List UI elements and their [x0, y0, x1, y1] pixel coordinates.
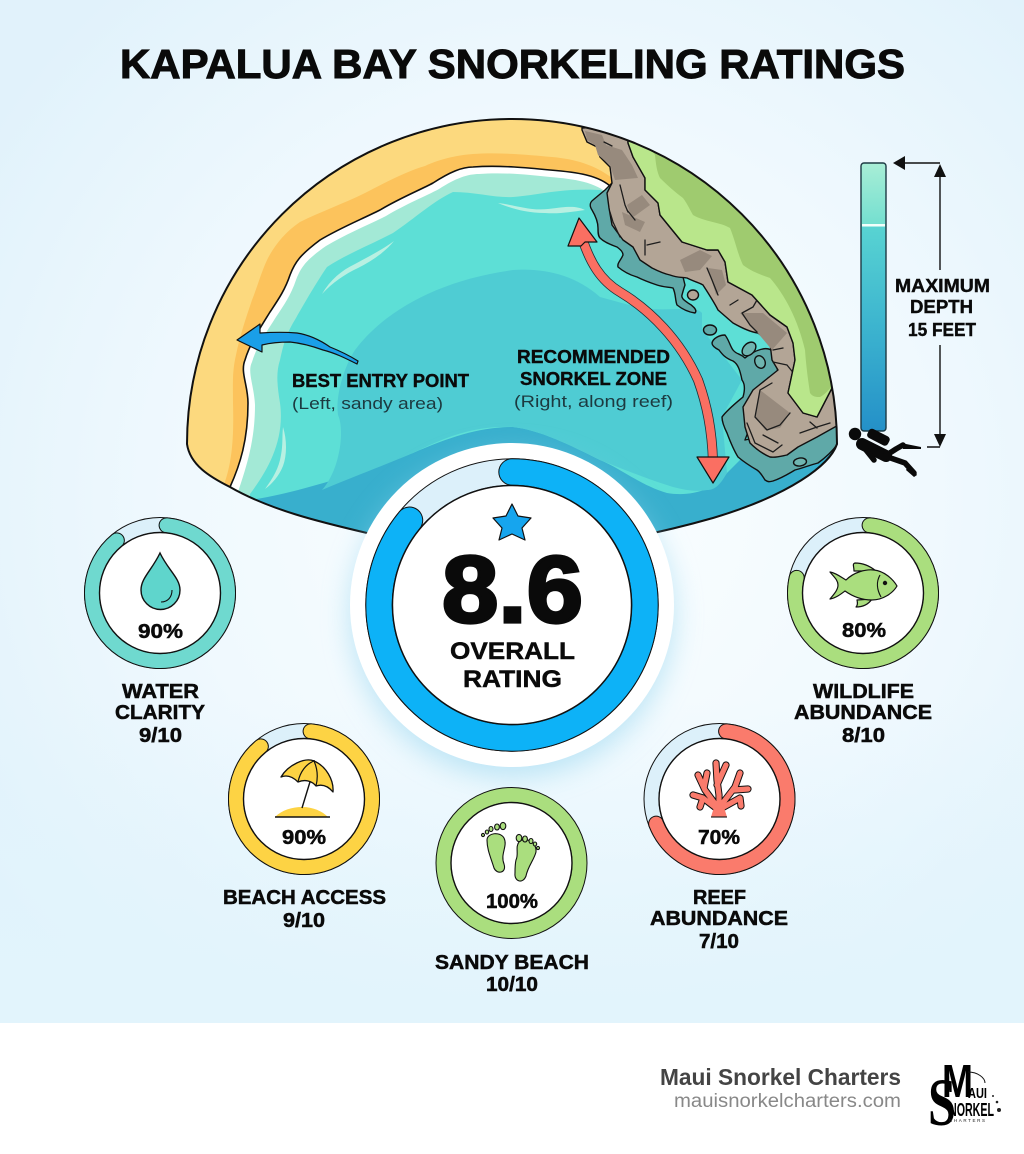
footer — [0, 1023, 1024, 1154]
coastal vegetation — [627, 141, 832, 418]
label — [435, 952, 589, 996]
ring — [229, 724, 379, 874]
darker vegetation — [654, 152, 831, 397]
water glints — [265, 203, 585, 489]
label: ABUNDANCE — [650, 908, 788, 930]
deep water — [256, 427, 832, 532]
label: best entry point: (Left, sandy area) — [292, 394, 443, 413]
label: CLARITY — [115, 702, 206, 724]
badge caption: RATING — [463, 666, 562, 693]
ring — [444, 795, 580, 931]
bay map — [186, 118, 838, 534]
logo: M — [942, 1055, 973, 1107]
label: 8/10 — [842, 725, 885, 747]
percent: 100% — [486, 891, 538, 913]
metric: water clarity — [85, 518, 235, 747]
label: WILDLIFE — [813, 681, 914, 703]
depth arrows — [893, 156, 946, 447]
label: 10/10 — [486, 974, 538, 996]
logo — [928, 1055, 1001, 1140]
shallow foam band — [238, 173, 604, 496]
label — [650, 887, 788, 953]
ring — [85, 518, 235, 668]
label: SANDY BEACH — [435, 952, 589, 974]
arrow: best entry point — [237, 324, 358, 364]
icon: fish — [830, 563, 897, 607]
rocky shore — [582, 125, 842, 457]
label — [223, 887, 386, 932]
logo: S — [928, 1064, 956, 1140]
reef shallow patches — [590, 183, 842, 482]
wet sand band — [222, 153, 612, 490]
label: recommended snorkel zone — [514, 347, 673, 411]
label: recommended snorkel zone: SNORKEL ZONE — [520, 369, 667, 389]
percent: 90% — [138, 621, 183, 643]
mid depth water — [322, 270, 742, 491]
label: REEF — [693, 887, 746, 909]
label — [794, 681, 932, 747]
overall rating badge — [350, 443, 674, 777]
progress ring — [379, 472, 645, 738]
icon: beach umbrella — [275, 760, 333, 817]
label: 9/10 — [139, 725, 182, 747]
label — [115, 681, 206, 747]
label: recommended snorkel zone: (Right, along reef) — [514, 392, 673, 411]
logo: CHARTERS — [949, 1118, 985, 1123]
label: ABUNDANCE — [794, 702, 932, 724]
label: best entry point: BEST ENTRY POINT — [292, 371, 469, 391]
score: 8.6 — [442, 537, 583, 643]
ring — [788, 518, 938, 668]
brand url: mauisnorkelcharters.com — [674, 1091, 901, 1112]
percent: 80% — [842, 620, 886, 642]
metric: reef abundance — [645, 724, 794, 953]
metric: beach access — [223, 724, 386, 932]
depth gauge — [861, 163, 886, 431]
ring — [645, 724, 794, 874]
label: maximum depth: 15 FEET — [908, 320, 976, 340]
sand beach — [188, 120, 610, 483]
logo: AUI — [968, 1085, 987, 1102]
icon: coral — [693, 763, 748, 817]
water and shoreline — [230, 166, 610, 490]
label: maximum depth: DEPTH — [910, 297, 973, 317]
icon: diver — [849, 428, 921, 477]
label: 9/10 — [283, 910, 325, 932]
label: best entry point — [292, 371, 469, 413]
bay outline — [187, 119, 837, 551]
turquoise water — [250, 190, 770, 499]
icon: footprints — [482, 822, 540, 881]
badge glow — [350, 453, 674, 777]
rock shading — [585, 131, 790, 430]
label: maximum depth: MAXIMUM — [895, 276, 990, 296]
arrow: recommended snorkel zone — [568, 218, 729, 483]
logo: NORKEL — [949, 1100, 994, 1120]
metric: sandy beach — [435, 795, 589, 996]
label: WATER — [122, 681, 200, 703]
label: BEACH ACCESS — [223, 887, 386, 909]
badge caption: OVERALL — [450, 638, 575, 665]
badge disc — [350, 443, 674, 767]
label: 7/10 — [699, 931, 739, 953]
brand name: Maui Snorkel Charters — [660, 1064, 901, 1090]
rock cracks — [604, 142, 830, 452]
percent: 70% — [698, 827, 740, 849]
badge caption — [450, 638, 575, 693]
label: maximum depth — [895, 276, 990, 340]
metric: wildlife abundance — [788, 518, 938, 747]
percent: 90% — [282, 827, 326, 849]
label: recommended snorkel zone: RECOMMENDED — [517, 347, 670, 367]
icon: water drop — [141, 553, 180, 610]
reef islets — [704, 325, 716, 335]
icon: star — [493, 504, 531, 540]
title: KAPALUA BAY SNORKELING RATINGS — [120, 41, 905, 87]
